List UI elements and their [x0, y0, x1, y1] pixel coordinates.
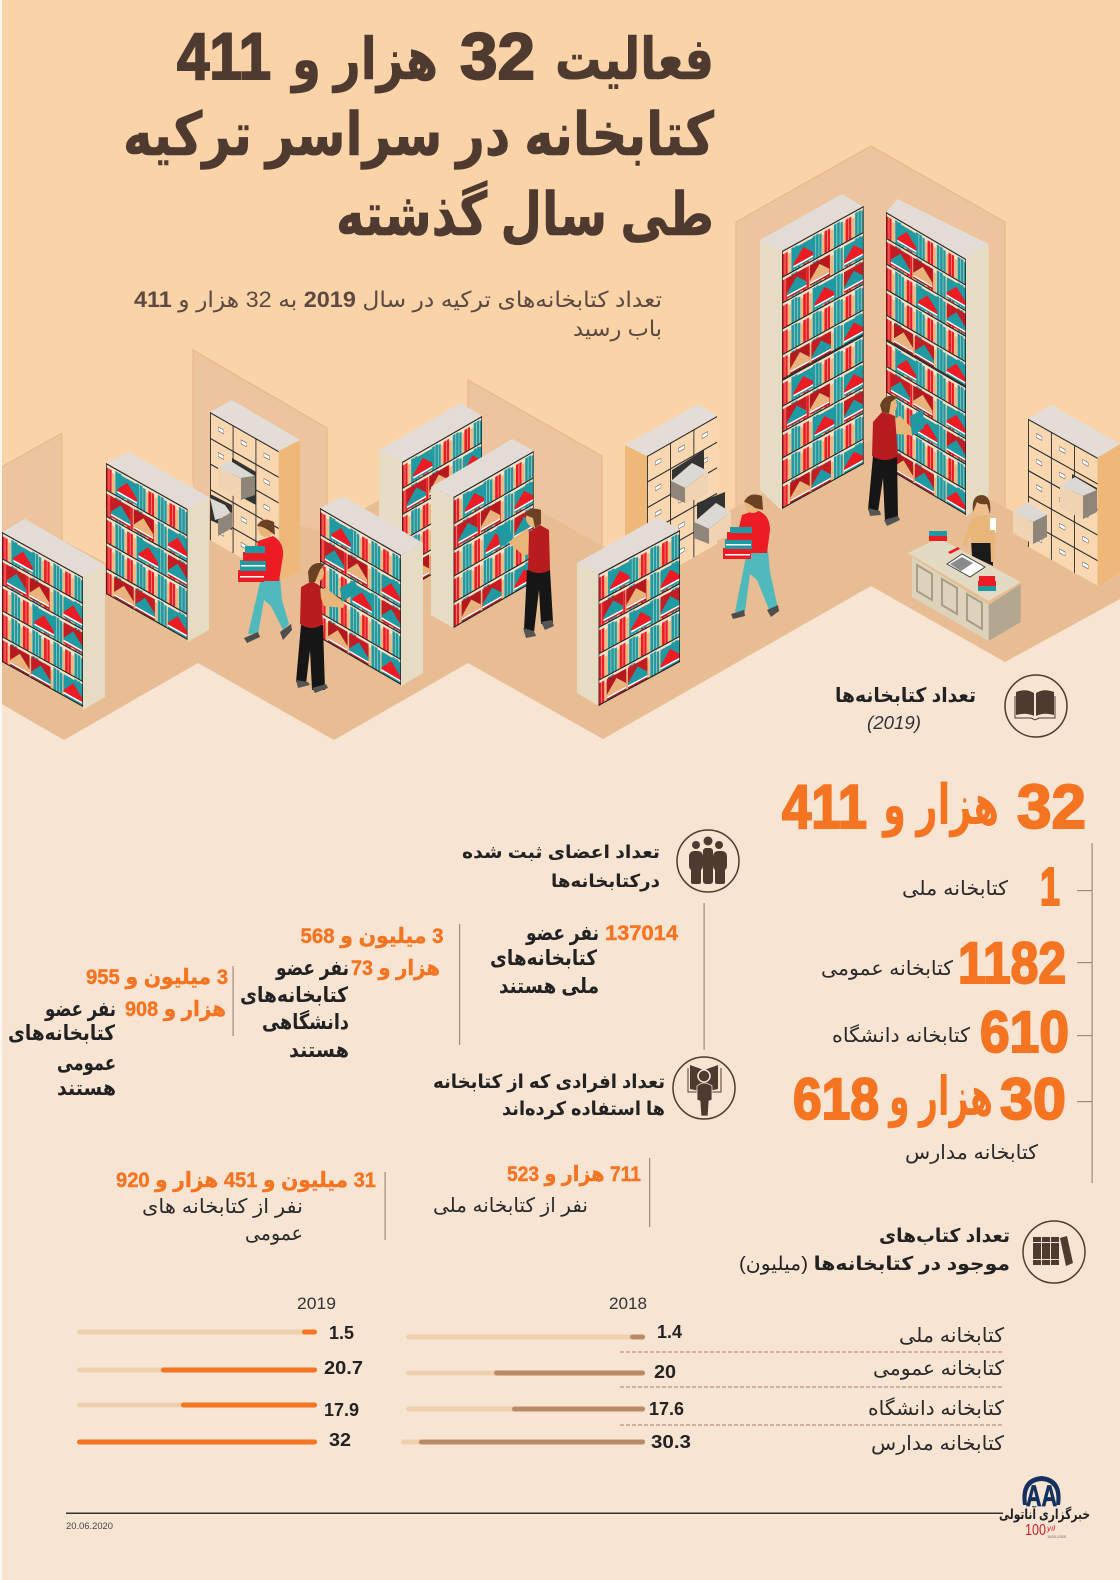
year label 2018: 2018: [609, 1294, 647, 1313]
icon: books: [1023, 1221, 1085, 1283]
values 2019: 1.5: [329, 1323, 354, 1343]
tall bookcase: alcove right: [886, 199, 989, 517]
university library label: کتابخانه دانشگاه: [832, 1024, 970, 1047]
title thousand: هزار و: [290, 27, 438, 94]
national users: [433, 1158, 650, 1227]
values 2018: 17.6: [649, 1399, 684, 1419]
icon: people: [677, 830, 739, 892]
university members: [240, 925, 444, 1062]
public members: عمومی: [57, 1052, 116, 1075]
heading: registered members: تعداد اعضای ثبت شده: [462, 842, 660, 862]
heading: library users: تعداد افرادی که از کتابخانه: [433, 1072, 665, 1093]
school library label: کتابخانه مدارس: [905, 1142, 1038, 1164]
title number 411: 411: [177, 19, 271, 93]
public members: [8, 966, 228, 1100]
row labels: کتابخانه ملی: [899, 1325, 1004, 1347]
heading: library users: [433, 1072, 665, 1120]
university library count: 610: [980, 1000, 1069, 1065]
bookshelf 6: [577, 517, 680, 706]
public library count: 1182: [958, 931, 1066, 996]
heading: registered members: درکتابخانه‌ها: [551, 871, 660, 891]
public members: کتابخانه‌های: [8, 1022, 116, 1045]
title line 1 word: فعالیت: [555, 27, 714, 92]
public library label: کتابخانه عمومی: [821, 958, 953, 980]
public users: [116, 1169, 386, 1245]
national users: نفر از کتابخانه ملی: [433, 1195, 588, 1217]
logo: Anadolu Agency: AA: [1026, 1480, 1057, 1513]
person carrying books: right: [723, 494, 779, 619]
values 2019: 17.9: [324, 1400, 359, 1420]
school library count: 30: [1000, 1067, 1066, 1132]
filing cabinet: centre: [625, 404, 731, 584]
wall alcoves: [0, 146, 1005, 575]
bookshelf 1: [2, 519, 105, 710]
title number 32: 32: [460, 19, 535, 93]
subtitle line 2: باب رسید: [573, 316, 662, 341]
values 2018: 1.4: [657, 1322, 682, 1342]
logo: Anadolu Agency: 100: [1025, 1522, 1046, 1539]
school library count: 618: [793, 1067, 879, 1132]
wall top edges: [0, 146, 1005, 546]
public members: 3 میلیون و 955: [86, 966, 228, 989]
person at tall bookcase: [868, 396, 924, 526]
subtitle: [134, 287, 662, 341]
person carrying books: left: [238, 519, 292, 643]
row labels: کتابخانه مدارس: [871, 1433, 1004, 1455]
panel: registered members: [8, 830, 739, 1100]
panel: number of libraries: [782, 675, 1093, 1183]
national members: 137014: [605, 922, 678, 945]
university members: هزار و 73: [351, 957, 440, 980]
panel: library users: [116, 1057, 735, 1245]
logo: Anadolu Agency: [999, 1476, 1090, 1539]
left page edge: [0, 0, 2, 1580]
heading: registered members: [462, 842, 660, 891]
divider lines: [232, 903, 705, 1050]
person at shelf: middle: [296, 563, 357, 693]
logo: Anadolu Agency: yıl: [1046, 1524, 1055, 1533]
heading year: (2019): [867, 713, 921, 733]
heading: number of books: موجود در کتابخانه‌ها (میلیون): [739, 1254, 1010, 1275]
bookshelf 3: [320, 496, 423, 686]
title line 2: کتابخانه در سراسر ترکیه: [123, 101, 714, 170]
values 2018: 30.3: [651, 1432, 691, 1452]
national members: [490, 922, 678, 998]
values 2019: 32: [329, 1430, 351, 1450]
heading: library users: ها استفاده کرده‌اند: [502, 1099, 665, 1120]
footer rule: [66, 1512, 1003, 1514]
panel: isometric library scene: [0, 0, 1120, 740]
title: [123, 19, 714, 248]
row labels: کتابخانه عمومی: [873, 1358, 1004, 1380]
national library count: 1: [1040, 857, 1060, 917]
title line 3: طی سال گذشته: [336, 180, 714, 248]
university members: کتابخانه‌های: [240, 984, 349, 1007]
national users: 711 هزار و 523: [507, 1163, 641, 1186]
reception desk: [908, 531, 1021, 641]
total libraries: 411: [782, 773, 867, 842]
school library count: هزار و: [887, 1067, 993, 1128]
bar chart: books in libraries: [77, 1294, 1004, 1455]
bars 2019: [77, 1330, 317, 1444]
logo: Anadolu Agency: خبرگزاری آناتولی: [999, 1505, 1090, 1523]
public users: عمومی: [245, 1223, 303, 1245]
row labels: کتابخانه دانشگاه: [868, 1397, 1004, 1420]
university members: دانشگاهی: [262, 1009, 349, 1034]
values 2018: [649, 1322, 691, 1452]
public members: هزار و 908: [125, 998, 226, 1021]
total libraries: [782, 773, 1086, 842]
national members: نفر عضو: [525, 922, 599, 945]
school library count: [793, 1067, 1066, 1132]
year label 2019: 2019: [297, 1294, 336, 1313]
bookshelf 5: [431, 439, 534, 628]
filing cabinet: left: [210, 400, 300, 580]
national members: ملی هستند: [499, 975, 599, 998]
icon: open book: [1005, 675, 1067, 737]
library floor: [0, 146, 1120, 740]
footer date: 20.06.2020: [66, 1521, 113, 1532]
university members: هستند: [289, 1039, 349, 1062]
university members: نفر عضو: [275, 957, 349, 980]
public users: 31 میلیون و 451 هزار و 920: [116, 1169, 376, 1192]
tall bookcase: alcove left: [760, 194, 864, 511]
bookshelf 2: [106, 452, 209, 642]
subtitle line 1: تعداد کتابخانه‌های ترکیه در سال 2019 به 32 هزار و 411: [134, 287, 662, 312]
bookshelf 4 rear: [379, 403, 482, 592]
public members: هستند: [57, 1077, 116, 1100]
values 2019: 20.7: [324, 1358, 363, 1378]
bars 2018: [401, 1334, 645, 1444]
public users: نفر از کتابخانه های: [142, 1196, 303, 1218]
filing cabinet: right: [1013, 405, 1120, 586]
row dividers: [620, 1352, 1004, 1425]
heading: number of books: [739, 1226, 1010, 1275]
logo: Anadolu Agency: 1920-2020: [1047, 1534, 1067, 1539]
tree axis: [1092, 843, 1093, 1183]
panel: number of books: [739, 1221, 1085, 1283]
row labels: [868, 1325, 1004, 1455]
upper wall background: [0, 0, 1120, 740]
librarian woman: [963, 495, 996, 566]
heading: number of libraries: تعداد کتابخانه‌ها: [835, 685, 976, 707]
national library label: کتابخانه ملی: [902, 878, 1008, 900]
national members: کتابخانه‌های: [490, 947, 598, 970]
total libraries: هزار و: [881, 773, 999, 838]
person at shelf: centre right: [497, 509, 554, 638]
total libraries: 32: [1017, 773, 1086, 842]
public members: نفر عضو: [44, 998, 116, 1021]
values 2018: 20: [654, 1362, 676, 1382]
values 2019: [324, 1323, 363, 1450]
university members: 3 میلیون و 568: [300, 925, 444, 948]
icon: reader: [673, 1057, 735, 1119]
heading: number of books: تعداد کتاب‌های: [879, 1226, 1010, 1247]
